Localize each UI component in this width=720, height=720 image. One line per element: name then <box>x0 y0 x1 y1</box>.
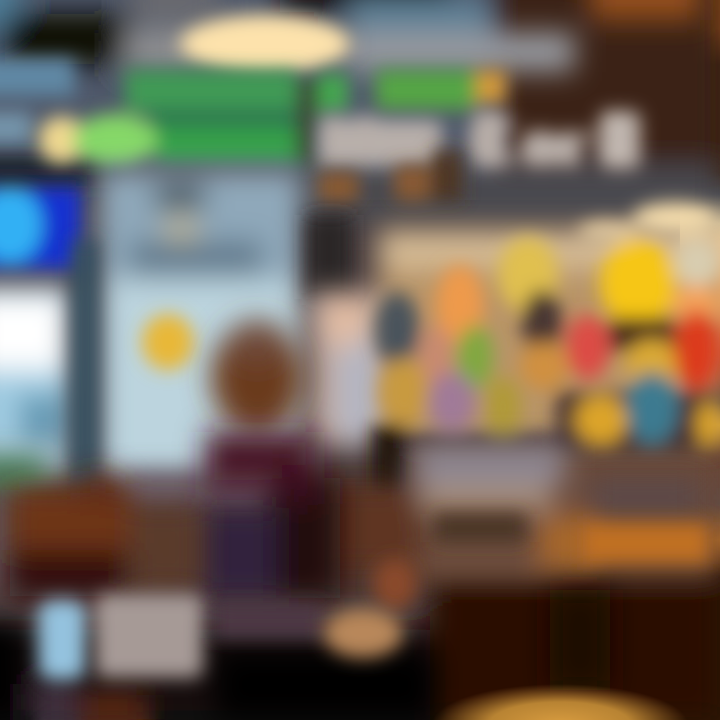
orange counter shelf <box>580 522 710 564</box>
window panels <box>0 170 302 480</box>
black foreground base <box>0 625 435 720</box>
foreground table items <box>0 594 435 720</box>
person: maroon shirt <box>196 432 340 598</box>
person: head <box>211 320 303 434</box>
seated customer at left <box>10 474 202 596</box>
blue cup <box>38 600 86 680</box>
bottom edge tones <box>0 650 720 720</box>
window column <box>72 215 352 490</box>
dark wood counter <box>550 590 610 690</box>
ceiling and upper wall <box>0 0 700 188</box>
counter menu text patch <box>434 514 526 542</box>
left wall blue bands <box>0 58 75 144</box>
bottom table lamp <box>432 684 688 720</box>
tan plate <box>323 608 403 658</box>
menu colour blocks <box>372 202 720 495</box>
ceiling lamp <box>179 14 351 74</box>
orange hand <box>373 558 417 610</box>
person with brown hair <box>196 320 340 598</box>
counter and lower wall <box>0 445 702 590</box>
white paper <box>95 594 203 678</box>
blue screen <box>0 186 82 270</box>
small orange lights under sign <box>317 150 462 202</box>
purple band <box>214 604 324 638</box>
sign text: Hot Card: Hot Card <box>318 97 638 184</box>
sun icon on poster <box>142 314 194 370</box>
colourful menu wall <box>310 228 720 447</box>
green sign lettering <box>38 70 506 166</box>
right edge tones <box>680 0 720 720</box>
